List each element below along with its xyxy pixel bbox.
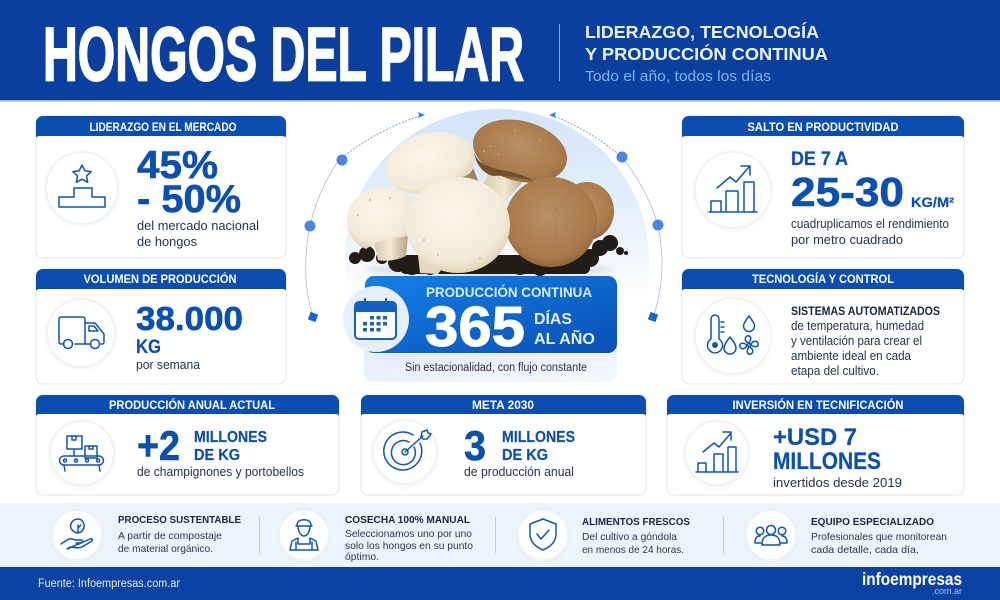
heading: META 2030 bbox=[472, 400, 534, 412]
text: Seleccionamos uno por uno bbox=[345, 528, 472, 540]
soil bbox=[349, 235, 628, 276]
heading: LIDERAZGO EN EL MERCADO bbox=[90, 122, 237, 134]
figure: +usd 7 millones: MILLONES bbox=[773, 448, 881, 475]
figure: de 7 a 25-30 kg/m2: KG/M² bbox=[911, 194, 954, 210]
icon: target bbox=[373, 420, 437, 484]
panel: meta 2030 bbox=[361, 395, 646, 495]
panel: volumen de producción bbox=[36, 269, 286, 384]
icon: growth chart bbox=[695, 152, 771, 228]
heading: TECNOLOGÍA Y CONTROL bbox=[752, 273, 894, 286]
central halo bbox=[345, 109, 649, 300]
description bbox=[791, 217, 949, 247]
figure: +2 millones de kg bbox=[137, 422, 267, 469]
icon: investment chart bbox=[685, 421, 749, 485]
panel: producción anual actual bbox=[36, 395, 339, 495]
text: cada detalle, cada día. bbox=[811, 544, 919, 556]
text: EQUIPO ESPECIALIZADO bbox=[811, 516, 934, 528]
description: etapa del cultivo. bbox=[791, 364, 879, 378]
brown top cap bbox=[466, 110, 574, 192]
logo bbox=[862, 569, 962, 596]
text: ALIMENTOS FRESCOS bbox=[582, 516, 690, 528]
figure: 38.000 kg: KG bbox=[136, 337, 161, 358]
figure: 3 millones de kg: 3 bbox=[464, 422, 486, 469]
text: Del cultivo a góndola bbox=[582, 531, 677, 543]
description: por metro cuadrado bbox=[791, 233, 903, 247]
subtitle: Y PRODUCCIÓN CONTINUA bbox=[585, 43, 828, 64]
caption: sin estacionalidad: Sin estacionalidad, con flujo constante bbox=[405, 362, 587, 374]
description: invertidos desde 2019 bbox=[773, 476, 902, 490]
label: días al año: DÍAS bbox=[534, 309, 572, 328]
title: HONGOS DEL PILAR bbox=[43, 12, 524, 98]
brown front cap bbox=[505, 177, 597, 267]
label: días al año bbox=[534, 309, 595, 348]
figure: +2 millones de kg: +2 bbox=[137, 422, 180, 469]
description: por semana bbox=[136, 358, 200, 372]
mushrooms illustration bbox=[347, 110, 628, 276]
big white cap bbox=[406, 177, 510, 273]
text: PROCESO SUSTENTABLE bbox=[118, 514, 241, 526]
subtitle bbox=[585, 21, 828, 85]
figure: 45% - 50%: 45% bbox=[137, 144, 218, 187]
description: cuadruplicamos el rendimiento bbox=[791, 217, 949, 231]
icon: climate sensors bbox=[695, 298, 771, 374]
heading: PRODUCCIÓN ANUAL ACTUAL bbox=[109, 399, 275, 412]
description: y ventilación para crear el bbox=[791, 334, 922, 348]
big white stem bbox=[418, 255, 445, 274]
icon: truck bbox=[47, 299, 115, 367]
figure: 3 millones de kg bbox=[464, 422, 575, 469]
left white stem bbox=[373, 236, 408, 261]
figure: 3 millones de kg: MILLONES bbox=[502, 429, 575, 446]
figure: +2 millones de kg: MILLONES bbox=[194, 429, 267, 446]
item: cosecha 100% manual bbox=[279, 510, 473, 563]
heading: SALTO EN PRODUCTIVIDAD bbox=[748, 122, 898, 134]
figure: +2 millones de kg: DE KG bbox=[194, 447, 240, 464]
number: 365: 365 bbox=[425, 295, 525, 359]
item: alimentos frescos bbox=[518, 510, 690, 560]
strip: values bbox=[0, 503, 1000, 567]
description: de producción anual bbox=[464, 465, 574, 479]
text: de material orgánico. bbox=[118, 543, 213, 555]
subtitle: Todo el año, todos los días bbox=[585, 68, 771, 85]
white top cap bbox=[379, 123, 481, 203]
figure: de 7 a 25-30 kg/m2: 25-30 bbox=[791, 169, 904, 215]
description: de temperatura, humedad bbox=[791, 319, 924, 333]
text: solo los hongos en su punto bbox=[345, 540, 473, 552]
footer band bbox=[0, 567, 1000, 600]
brown stem bbox=[483, 168, 526, 203]
panel: tecnología y control bbox=[682, 269, 964, 384]
icon: podium with star bbox=[46, 152, 118, 224]
description: de hongos bbox=[137, 235, 197, 249]
description: SISTEMAS AUTOMATIZADOS bbox=[791, 306, 940, 318]
figure: 45% - 50% bbox=[137, 144, 241, 221]
text: COSECHA 100% MANUAL bbox=[345, 514, 471, 526]
text bbox=[811, 516, 947, 556]
figure: 45% - 50%: - 50% bbox=[137, 178, 241, 221]
figure: 3 millones de kg: DE KG bbox=[502, 447, 548, 464]
source: Fuente: Infoempresas.com.ar bbox=[38, 578, 180, 590]
text bbox=[118, 514, 241, 555]
figure: +usd 7 millones bbox=[773, 424, 881, 475]
orbit arcs bbox=[304, 112, 664, 322]
panel: liderazgo en el mercado bbox=[36, 116, 286, 258]
description: del mercado nacional bbox=[137, 219, 259, 233]
text: en menos de 24 horas. bbox=[582, 544, 684, 556]
figure: +usd 7 millones: +USD 7 bbox=[773, 424, 857, 451]
figure: de 7 a 25-30 kg/m2 bbox=[791, 149, 954, 215]
figure: 38.000 kg bbox=[136, 300, 243, 358]
figure: de 7 a 25-30 kg/m2: DE 7 A bbox=[791, 149, 848, 170]
subtitle: LIDERAZGO, TECNOLOGÍA bbox=[585, 21, 819, 42]
text: A partir de compostaje bbox=[118, 530, 222, 542]
figure: 38.000 kg: 38.000 bbox=[136, 300, 243, 337]
left white cap bbox=[347, 187, 414, 249]
description bbox=[137, 219, 259, 249]
icon: calendar bbox=[343, 286, 409, 352]
panel: salto en productividad bbox=[682, 116, 964, 258]
label: días al año: AL AÑO bbox=[534, 328, 595, 348]
back brown mushroom bbox=[560, 182, 614, 240]
description bbox=[791, 306, 940, 378]
heading: INVERSIÓN EN TECNIFICACIÓN bbox=[732, 399, 904, 412]
text bbox=[345, 514, 473, 563]
text bbox=[582, 516, 690, 556]
description: ambiente ideal en cada bbox=[791, 349, 911, 363]
heading: VOLUMEN DE PRODUCCIÓN bbox=[84, 273, 236, 286]
description: de champignones y portobellos bbox=[137, 465, 304, 479]
item: equipo especializado bbox=[746, 510, 947, 560]
panel: inversión en tecnificación bbox=[667, 395, 964, 495]
panel: producción continua bbox=[343, 276, 617, 382]
logo: .com.ar bbox=[932, 586, 962, 596]
heading: producción continua: PRODUCCIÓN CONTINUA bbox=[426, 283, 592, 300]
item: proceso sustentable bbox=[52, 510, 241, 560]
text: Profesionales que monitorean bbox=[811, 531, 947, 543]
header band bbox=[0, 0, 1000, 102]
text: óptimo. bbox=[345, 551, 379, 563]
logo: infoempresas bbox=[862, 569, 962, 589]
icon: conveyor belt bbox=[50, 421, 114, 485]
